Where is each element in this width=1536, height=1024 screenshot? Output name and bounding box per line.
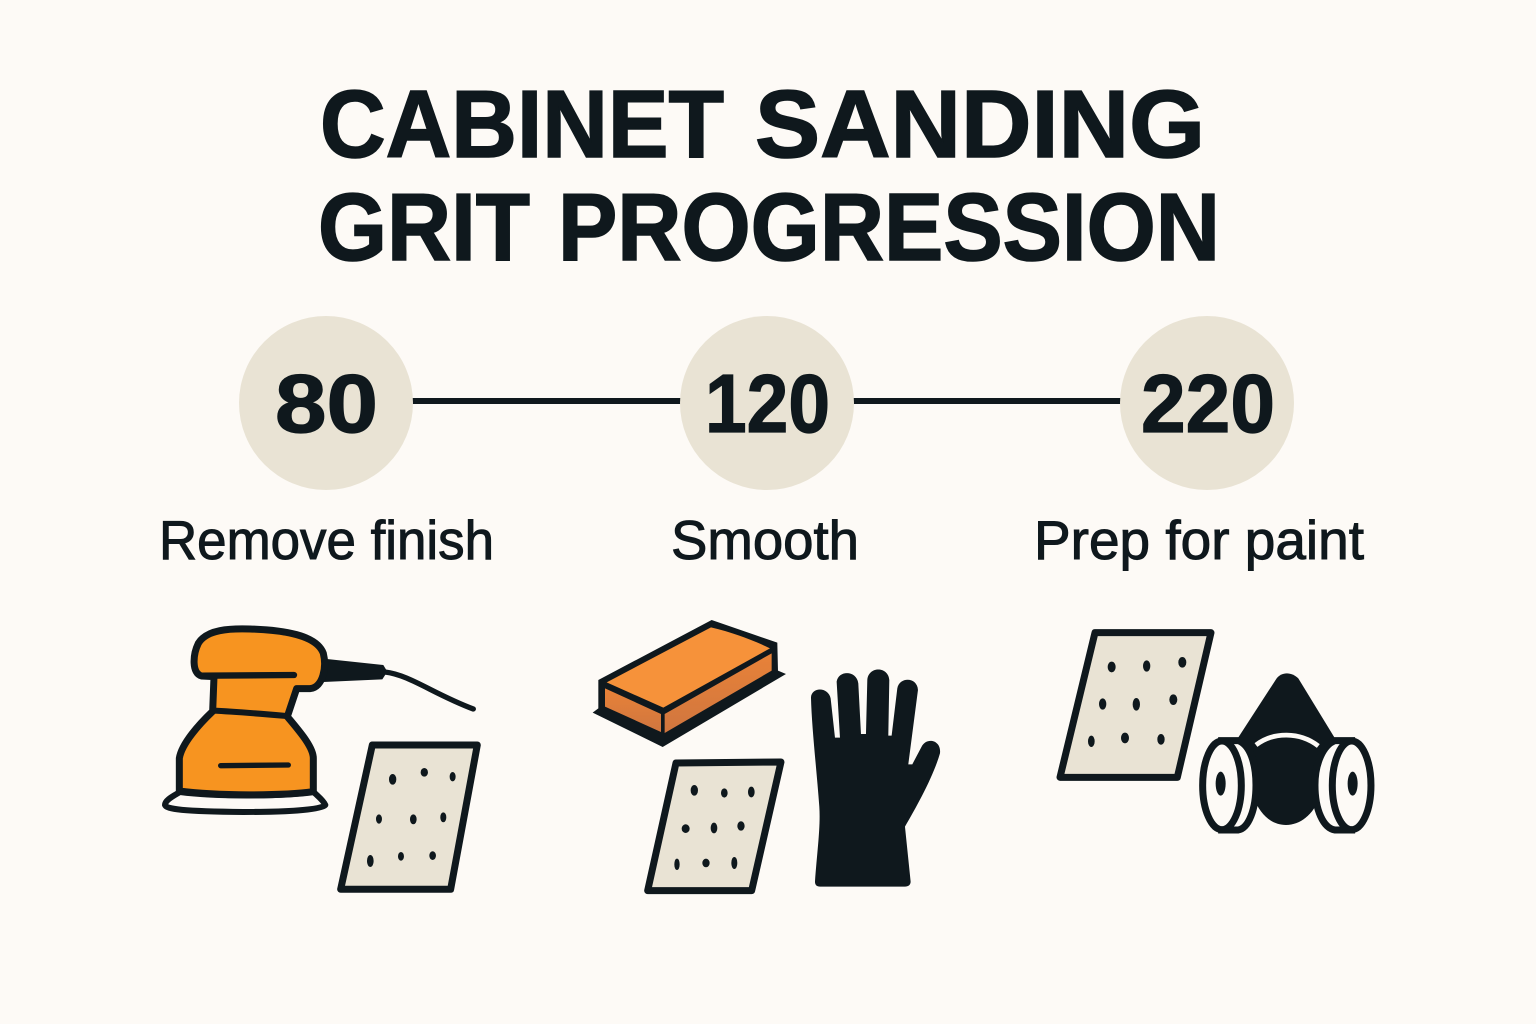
step 220 badge: 220 <box>1141 357 1275 450</box>
step 120 badge: 120 <box>705 357 830 450</box>
block top face <box>607 627 770 708</box>
mask highlight arc <box>1256 735 1318 746</box>
icon: sandpaper sheet 80 <box>341 745 477 889</box>
sander detail lines <box>202 675 294 766</box>
step 120 badge <box>680 316 854 490</box>
label: remove finish: Remove finish <box>159 509 494 571</box>
title: PROGRESSION <box>558 174 1220 281</box>
title: GRIT <box>318 174 530 281</box>
step 80 badge <box>239 316 413 490</box>
icon: respirator mask <box>1203 673 1371 830</box>
icon: sandpaper sheet 220 <box>1060 633 1211 777</box>
title: CABINET <box>320 71 724 178</box>
step 220 badge <box>1120 316 1294 490</box>
title: SANDING <box>755 71 1205 178</box>
sander base plate <box>165 792 325 812</box>
label: smooth: Smooth <box>671 509 859 571</box>
title <box>318 71 1220 281</box>
block side faces <box>605 653 772 733</box>
label: prep for paint: Prep for paint <box>1034 509 1364 571</box>
progression connector lines <box>412 398 1121 404</box>
sander cord and plug <box>323 659 473 709</box>
step 80 badge: 80 <box>275 357 378 450</box>
right filter cartridge <box>1315 741 1371 830</box>
left filter cartridge <box>1203 741 1256 830</box>
icon: work glove <box>811 669 940 887</box>
icon: sandpaper sheet 120 <box>648 762 781 891</box>
icon: sanding block <box>593 620 786 747</box>
sander body <box>179 629 325 795</box>
mask nose piece and face <box>1237 673 1336 825</box>
icon: orbital sander <box>165 629 473 812</box>
